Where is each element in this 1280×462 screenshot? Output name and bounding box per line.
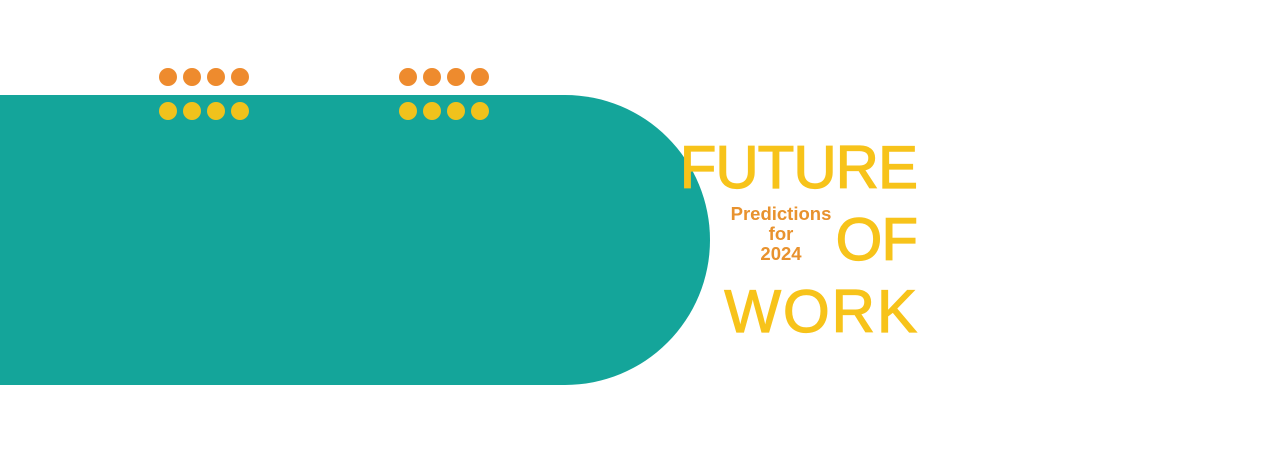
subtitle: Predictions for 2024: for xyxy=(769,223,793,244)
subtitle: Predictions for 2024: Predictions xyxy=(731,203,831,224)
icon: dots group right xyxy=(399,68,489,120)
title: OF: OF xyxy=(836,206,917,273)
panel: teal rounded band xyxy=(0,95,710,385)
title: FUTURE: FUTURE xyxy=(680,134,917,201)
title: WORK: WORK xyxy=(724,278,919,345)
icon: dots group left xyxy=(159,68,249,120)
subtitle: Predictions for 2024 xyxy=(731,203,831,264)
subtitle: Predictions for 2024: 2024 xyxy=(760,243,802,264)
